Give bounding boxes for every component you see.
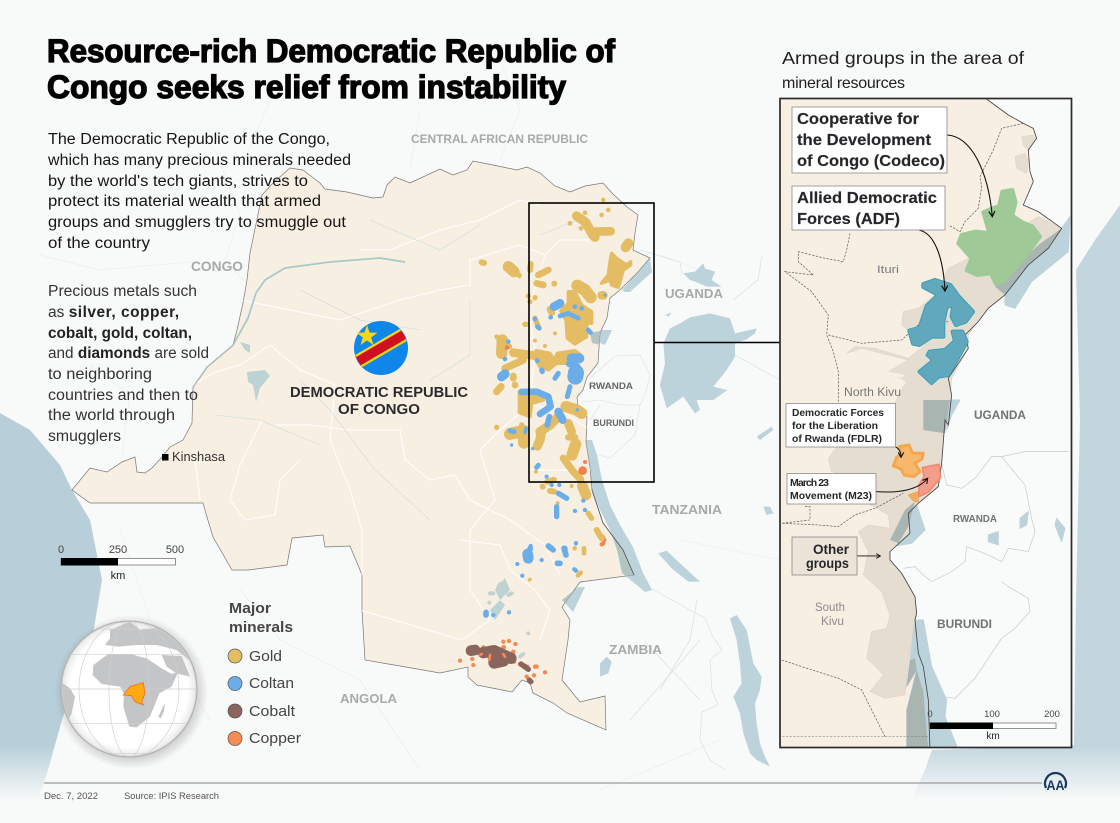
minerals text block: the world through: [48, 407, 175, 424]
icon: flag of DR Congo: [354, 321, 408, 375]
inset: national border: [890, 97, 1062, 750]
callout: FDLR: [786, 404, 896, 447]
map: eastern copper deposits: [505, 345, 607, 545]
scale bar: inset: 200: [1044, 709, 1060, 720]
map: coltan deposits: [502, 295, 605, 550]
title: Congo seeks relief from instability: [47, 69, 566, 105]
label: kinshasa: Kinshasa: [172, 449, 226, 464]
inset heading: [782, 48, 1024, 92]
footer: [44, 783, 1042, 802]
minerals text block: and diamonds are sold: [48, 345, 209, 362]
minerals text block: countries and then to: [48, 387, 198, 404]
inset labels: Kivu: [821, 616, 844, 628]
callout: other groups: groups: [806, 555, 849, 571]
scale bar: main map: 500: [166, 544, 184, 556]
intro text block: groups and smugglers try to smuggle out: [48, 214, 347, 231]
arrow: FDLR: [895, 447, 901, 457]
map: southern coltan and copper belt: [460, 532, 603, 682]
minerals text block: [48, 283, 209, 445]
label: tanzania: TANZANIA: [652, 502, 723, 517]
scale bar: inset: km: [986, 731, 1000, 742]
area: M23: [908, 464, 941, 502]
label: angola: ANGOLA: [340, 691, 398, 706]
label: congo: CONGO: [191, 259, 243, 274]
legend: major minerals: minerals: [229, 620, 293, 636]
footer: Source: IPIS Research: [124, 791, 219, 802]
inset labels: [815, 264, 1026, 631]
callout: ADF: [792, 186, 945, 230]
legend: major minerals: Cobalt: [249, 703, 296, 720]
callout: Codeco: [792, 107, 947, 173]
callout: Codeco: of Congo (Codeco): [797, 153, 945, 170]
inset labels: RWANDA: [953, 514, 997, 525]
scale bar: main map: 0: [58, 544, 64, 556]
intro text block: The Democratic Republic of the Congo,: [48, 131, 330, 148]
intro text block: which has many precious minerals needed: [47, 152, 351, 169]
inset: lake overlays on territory: [890, 228, 1062, 750]
legend: major minerals: [228, 601, 301, 747]
callout: ADF: Allied Democratic: [797, 190, 937, 207]
inset labels: UGANDA: [974, 408, 1026, 422]
intro text block: of the country: [48, 235, 150, 252]
locator rectangle and leader line: [529, 203, 780, 482]
label: central african republic: CENTRAL AFRICAN REPUBLIC: [411, 134, 588, 146]
inset: province borders: [782, 123, 1023, 737]
rwanda burundi outline: [582, 355, 650, 458]
label: rwanda: RWANDA: [589, 381, 633, 392]
inset labels: Ituri: [877, 264, 899, 276]
panel: armed groups inset map: [775, 95, 1072, 750]
callout: FDLR: for the Liberation: [792, 420, 878, 432]
scale bar: inset: 100: [984, 709, 1000, 720]
title: Resource-rich Democratic Republic of: [47, 33, 615, 69]
arrow: Codeco: [947, 135, 992, 217]
scale bar: main map: 250: [109, 544, 127, 556]
inset: other groups territory: [828, 135, 1062, 698]
arrow: M23: [876, 478, 928, 492]
map: gold deposits: [482, 200, 631, 538]
legend: major minerals: Gold: [249, 648, 282, 665]
minerals text block: cobalt, gold, coltan,: [48, 325, 192, 342]
callout: other groups: Other: [813, 541, 850, 557]
arrow: ADF: [919, 230, 945, 291]
title: [47, 33, 615, 105]
legend: major minerals: Coltan: [249, 675, 294, 692]
minerals text block: Precious metals such: [48, 283, 197, 300]
legend: major minerals: Copper: [249, 730, 301, 747]
inset frame: [780, 98, 1072, 748]
scale bar: main map: [58, 544, 184, 582]
callout: M23: Movement (M23): [790, 490, 872, 502]
country label: democratic republic of congo: DEMOCRATIC REPUBLIC: [290, 385, 469, 401]
minerals text block: smugglers: [48, 428, 121, 445]
footer: Dec. 7, 2022: [44, 791, 98, 802]
inset: rwanda and burundi borders: [903, 452, 1068, 698]
label: zambia: ZAMBIA: [609, 642, 663, 657]
inset heading: mineral resources: [782, 75, 905, 92]
intro text block: [47, 131, 351, 252]
inset heading: Armed groups in the area of: [782, 48, 1024, 68]
callout: M23: [787, 474, 876, 504]
inset labels: North Kivu: [844, 387, 901, 399]
area: ADF: [909, 280, 973, 383]
callout: other groups: [792, 537, 857, 575]
legend: major minerals: Major: [229, 601, 271, 617]
callout: M23: March 23: [790, 477, 829, 489]
callout: Codeco: Cooperative for: [797, 111, 919, 128]
minerals text block: to neighboring: [48, 366, 152, 383]
inset labels: BURUNDI: [937, 617, 992, 631]
area: FDLR: [893, 445, 923, 477]
map: Democratic Republic of Congo: [72, 161, 652, 730]
callout: FDLR: of Rwanda (FDLR): [792, 433, 882, 445]
scale bar: inset: [927, 709, 1060, 742]
scale bar: main map: km: [111, 570, 125, 582]
area: Codeco: [958, 190, 1040, 284]
label: burundi: BURUNDI: [593, 418, 634, 429]
scale bar: inset: 0: [927, 709, 933, 720]
country label: democratic republic of congo: OF CONGO: [338, 402, 420, 418]
arrow: other groups: [857, 555, 880, 557]
intro text block: by the world's tech giants, strives to: [48, 173, 308, 190]
callout: FDLR: Democratic Forces: [792, 407, 884, 419]
lakes of the region: [562, 258, 773, 767]
country label: democratic republic of congo: [290, 385, 469, 418]
icon: AA logo: AA: [1046, 777, 1064, 793]
callout: ADF: Forces (ADF): [797, 211, 900, 228]
minerals text block: as silver, copper,: [48, 304, 180, 321]
callout: Codeco: the Development: [797, 132, 932, 149]
locator globe: [54, 615, 208, 769]
inset: DRC territory: [775, 95, 1062, 750]
intro text block: protect its material wealth that armed: [48, 193, 321, 210]
label: uganda: UGANDA: [665, 286, 724, 301]
inset labels: South: [815, 602, 845, 614]
